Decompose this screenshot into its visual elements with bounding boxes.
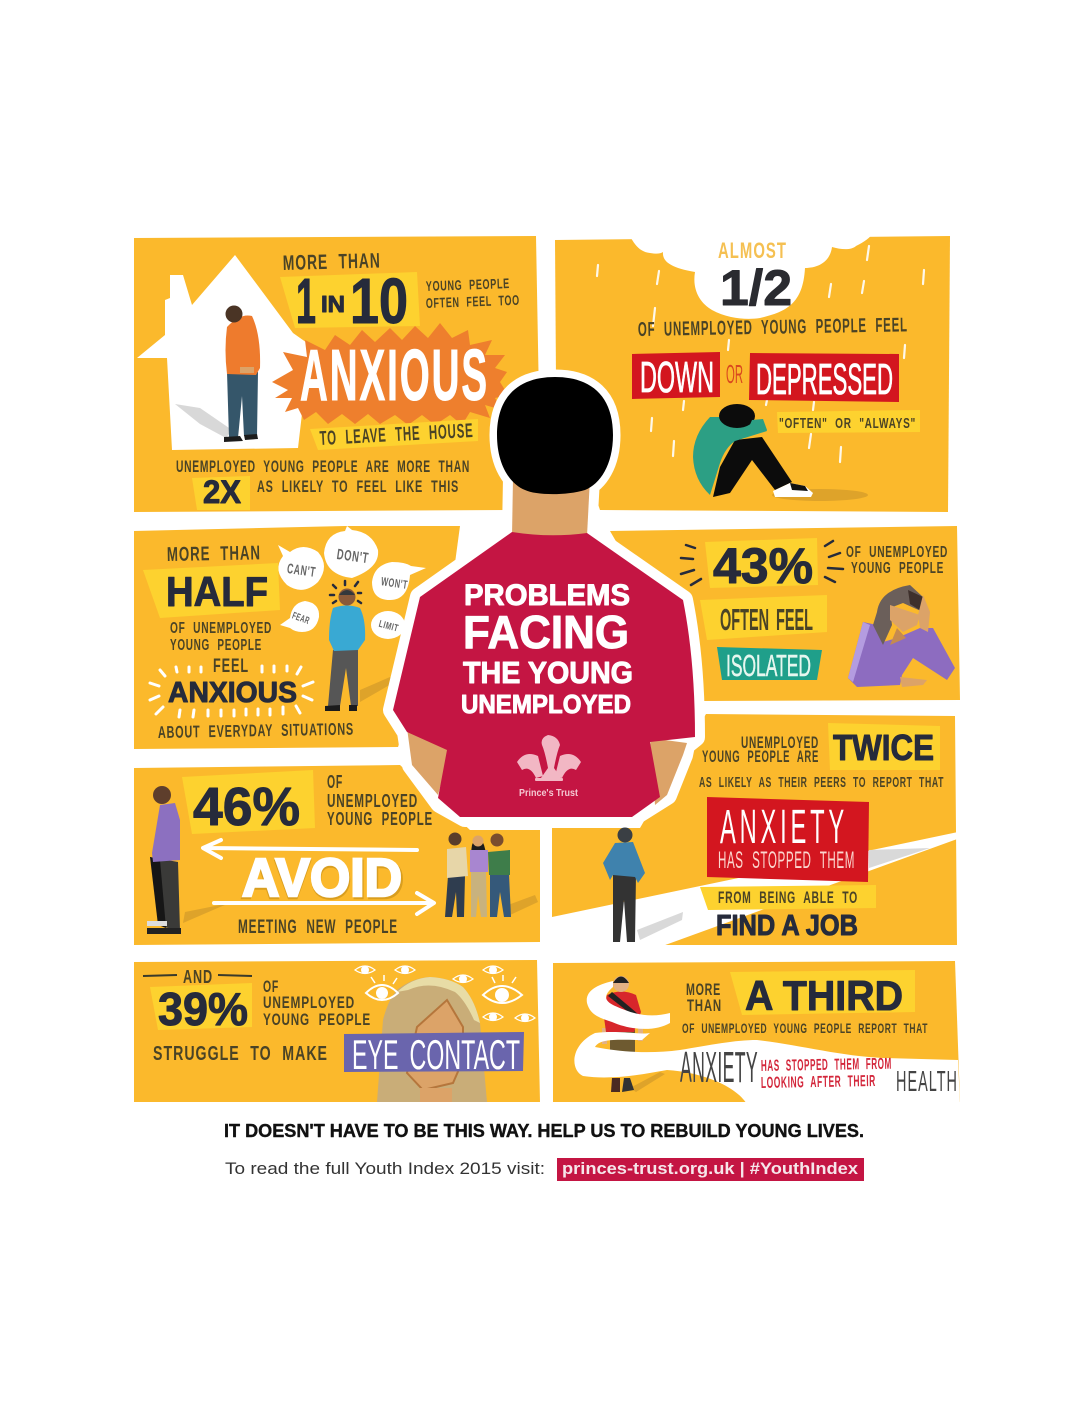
text: has stopped them from looking after their: LOOKING AFTER THEIR bbox=[761, 1073, 876, 1092]
panel: 39% eye contact bbox=[134, 960, 540, 1102]
icon: rain lines bbox=[597, 246, 924, 462]
highlight: often or always bbox=[777, 410, 920, 433]
highlight: 2x bbox=[192, 476, 250, 510]
text: about everyday situations: ABOUT EVERYDAY SITUATIONS bbox=[158, 720, 354, 742]
text: of unemployed young people: OF UNEMPLOYED bbox=[846, 544, 948, 561]
highlight: half bbox=[143, 563, 280, 618]
icon: woman with blonde hair bbox=[377, 977, 487, 1102]
icon: man in red shirt bbox=[602, 976, 665, 1092]
label: depressed bbox=[749, 353, 899, 404]
callout: anxiety has stopped them: ANXIETY bbox=[720, 801, 848, 854]
text: struggle to make: STRUGGLE TO MAKE bbox=[153, 1043, 328, 1065]
text: almost: ALMOST bbox=[718, 238, 787, 263]
speech bubble: fear: FEAR bbox=[290, 611, 311, 627]
icon: group of three people bbox=[445, 832, 538, 917]
logo text: Prince's Trust bbox=[519, 787, 578, 799]
footer headline: IT DOESN'T HAVE TO BE THIS WAY. HELP US TO REBUILD YOUNG LIVES. bbox=[224, 1121, 864, 1141]
speech bubble: limit: LIMIT bbox=[377, 619, 400, 635]
panel: a third health bbox=[553, 961, 960, 1104]
statistic: 1 in 10 bbox=[296, 265, 408, 337]
speech bubble: don't bbox=[324, 526, 378, 578]
shirt bbox=[393, 532, 695, 817]
text: young people often feel too: OFTEN FEEL TOO bbox=[426, 292, 520, 311]
speech bubble: can't: CAN'T bbox=[286, 560, 317, 580]
statistic: twice: TWICE bbox=[833, 727, 934, 768]
central figure: young person from behind bbox=[393, 377, 695, 817]
callout: anxiety has stopped them: HAS STOPPED THEM bbox=[718, 847, 855, 874]
statistic: 1 in 10: 1 bbox=[296, 265, 316, 337]
text: more than: THAN bbox=[687, 996, 722, 1015]
highlight: 43% bbox=[705, 538, 818, 588]
icon: white ribbon and torn area bbox=[574, 981, 960, 1104]
panel: a third health: ANXIETY bbox=[680, 1043, 758, 1092]
text: and with rules bbox=[143, 967, 252, 987]
text: as likely to feel like this: AS LIKELY TO FEEL LIKE THIS bbox=[257, 477, 459, 496]
label: eye contact bbox=[344, 1031, 524, 1078]
icon: watching eyes bbox=[355, 966, 535, 1022]
statistic: 1 in 10: IN bbox=[321, 291, 345, 317]
text: more than: MORE THAN bbox=[167, 542, 261, 566]
text: meeting new people: MEETING NEW PEOPLE bbox=[238, 917, 398, 938]
text: more than: MORE THAN bbox=[283, 249, 381, 275]
text: unemployed young people are: UNEMPLOYED bbox=[741, 733, 819, 752]
panel: down or depressed bbox=[555, 232, 950, 512]
speech bubble: won't: WON'T bbox=[380, 574, 409, 592]
speech bubble: don't: DON'T bbox=[336, 546, 370, 567]
highlight: 39% bbox=[150, 983, 252, 1030]
speech bubble: fear bbox=[280, 601, 319, 632]
statistic: 46%: 46% bbox=[193, 777, 300, 837]
speech bubble: won't bbox=[372, 562, 426, 600]
statistic: anxious with rays: ANXIOUS bbox=[168, 677, 297, 709]
speech bubble: can't bbox=[278, 545, 324, 590]
label: down bbox=[632, 352, 720, 402]
text: unemployed more than: UNEMPLOYED YOUNG PEOPLE ARE MORE THAN bbox=[176, 457, 470, 476]
panel: twice find a job bbox=[552, 714, 960, 948]
label: isolated bbox=[717, 647, 822, 683]
panel: 46% avoid bbox=[134, 765, 540, 945]
title: THE YOUNG bbox=[463, 655, 633, 690]
panel: more than half anxious bbox=[134, 526, 460, 749]
footer text: To read the full Youth Index 2015 visit: bbox=[225, 1159, 545, 1178]
text: of unemployed young people bbox=[263, 977, 371, 1029]
footer link box: princes-trust.org.uk | #YouthIndex bbox=[562, 1159, 859, 1178]
statistic: find a job: FIND A JOB bbox=[716, 910, 858, 942]
text: avoid: AVOID bbox=[241, 850, 404, 910]
head outline bbox=[497, 377, 613, 490]
icon: white house bbox=[137, 255, 310, 450]
text: of unemployed young people: OF bbox=[263, 977, 279, 996]
highlight: 46% bbox=[182, 770, 315, 834]
text: from being able to: FROM BEING ABLE TO bbox=[718, 888, 858, 907]
statistic: a third: A THIRD bbox=[745, 972, 903, 1019]
label: isolated: ISOLATED bbox=[726, 648, 811, 683]
text: more than bbox=[686, 980, 722, 1015]
text: often or always: "OFTEN" OR "ALWAYS" bbox=[779, 415, 916, 432]
icon: man on road from behind bbox=[603, 828, 683, 942]
road bbox=[552, 832, 960, 948]
title: PROBLEMS bbox=[464, 579, 630, 612]
icon: Prince's Trust feathers logo bbox=[517, 735, 581, 781]
text: feel: FEEL bbox=[213, 656, 249, 677]
highlight: often feel bbox=[700, 595, 827, 640]
panel: 43% isolated bbox=[610, 526, 960, 701]
text: of unemployed young people: YOUNG PEOPLE bbox=[851, 560, 944, 577]
icon: white cloud bbox=[628, 232, 874, 319]
arrow: pointing left bbox=[203, 840, 417, 858]
icon: orange burst bbox=[272, 323, 508, 425]
statistic: 43%: 43% bbox=[713, 538, 813, 594]
statistic: half: HALF bbox=[166, 568, 268, 615]
text: of unemployed young people: UNEMPLOYED bbox=[263, 993, 355, 1012]
statistic: anxious with rays bbox=[150, 666, 313, 717]
text: of unemployed young people: OF bbox=[327, 772, 343, 792]
text: young people often feel too bbox=[426, 275, 520, 311]
arms bbox=[407, 728, 687, 805]
text: has stopped them from looking after their: HAS STOPPED THEM FROM bbox=[761, 1056, 892, 1075]
panel: 43% isolated: OFTEN FEEL bbox=[720, 602, 813, 637]
text: and with rules: AND bbox=[183, 967, 213, 987]
icon: man in purple looking away bbox=[147, 786, 230, 934]
icon: woman holding head in purple bbox=[848, 585, 955, 687]
icon: anxious man in orange hoodie bbox=[175, 306, 260, 442]
text: unemployed young people are bbox=[702, 733, 819, 766]
icon: left rays bbox=[681, 541, 843, 585]
highlight: 1 in 10 bbox=[280, 272, 420, 328]
text: avoid: AVOID bbox=[242, 848, 402, 908]
highlight: to leave the house bbox=[310, 419, 478, 450]
icon: sitting depressed figure bbox=[693, 404, 868, 501]
text: unemployed young people are: YOUNG PEOPLE ARE bbox=[702, 747, 819, 766]
statistic: one half: 1/2 bbox=[720, 260, 792, 316]
text: young people often feel too: YOUNG PEOPLE bbox=[426, 275, 510, 294]
text: of unemployed young people: OF UNEMPLOYED bbox=[170, 620, 272, 637]
label: depressed: DEPRESSED bbox=[756, 355, 893, 404]
text: of unemployed young people bbox=[846, 544, 948, 577]
arrow: pointing right bbox=[214, 893, 434, 914]
text: more than: MORE bbox=[686, 980, 721, 999]
neck bbox=[512, 478, 590, 536]
panel: down or depressed: OR bbox=[726, 359, 743, 389]
label: down: DOWN bbox=[640, 353, 714, 402]
text: of unemployed report: OF UNEMPLOYED YOUNG PEOPLE REPORT THAT bbox=[682, 1020, 928, 1036]
title: FACING bbox=[463, 606, 629, 658]
title bbox=[461, 579, 633, 719]
statistic: 2x: 2X bbox=[203, 474, 242, 510]
text: of unemployed young people: UNEMPLOYED bbox=[327, 791, 418, 811]
panel: a third health: HEALTH bbox=[896, 1066, 958, 1098]
shadow on road bbox=[869, 848, 930, 868]
statistic: 39%: 39% bbox=[158, 983, 248, 1035]
text: of unemployed young people bbox=[327, 772, 433, 829]
panel: one in ten anxious bbox=[134, 236, 539, 512]
highlight: from being able to bbox=[700, 885, 876, 910]
callout: anxiety has stopped them bbox=[707, 797, 869, 882]
statistic: 1 in 10: 10 bbox=[350, 265, 408, 337]
text: of unemployed young people: YOUNG PEOPLE bbox=[263, 1010, 371, 1029]
title: UNEMPLOYED bbox=[461, 689, 631, 719]
speech bubble: limit bbox=[371, 611, 405, 639]
label: eye contact: EYE CONTACT bbox=[352, 1031, 520, 1078]
text: of unemployed young people: YOUNG PEOPLE bbox=[327, 809, 433, 829]
icon: worried man in blue jumper bbox=[325, 581, 393, 711]
head bbox=[497, 377, 613, 494]
body outline bbox=[393, 478, 695, 817]
text: of unemployed young people: YOUNG PEOPLE bbox=[170, 637, 262, 654]
highlight: twice bbox=[828, 723, 940, 770]
text: of unemployed young people bbox=[170, 620, 272, 654]
highlight: a third bbox=[730, 970, 915, 1015]
text: anxious: ANXIOUS bbox=[300, 336, 489, 416]
text: to leave the house: TO LEAVE THE HOUSE bbox=[319, 420, 474, 450]
text: has stopped them from looking after their bbox=[761, 1056, 892, 1092]
